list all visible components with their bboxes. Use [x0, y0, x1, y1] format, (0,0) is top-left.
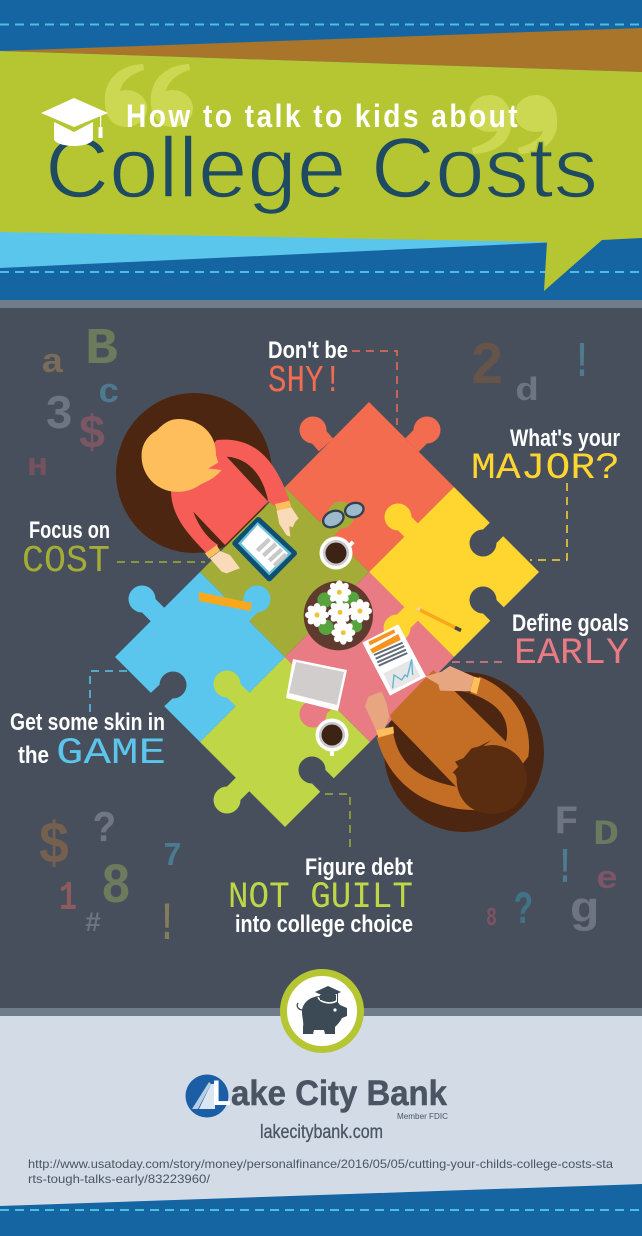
- floating letters: upper right: d: [515, 373, 539, 410]
- source url: rts-tough-talks-early/83223960/: [28, 1172, 211, 1186]
- floating letters: lower left: #: [85, 909, 101, 940]
- shadow circle: person one: [116, 393, 272, 553]
- callout: Focus on COST: Focus on: [29, 517, 110, 544]
- callout: What's your MAJOR: [471, 425, 620, 560]
- floating letters: lower left: 8: [101, 856, 131, 920]
- body and arms: [377, 670, 529, 810]
- website: lakecitybank.com: [260, 1122, 383, 1143]
- callout: Don't be SHY: Don't be: [268, 337, 348, 364]
- callout: Figure debt NOT GUILT: Figure debt: [305, 854, 413, 881]
- floating letters: upper left: c: [98, 375, 120, 413]
- floating letters: lower right: [486, 800, 619, 937]
- tablet: [235, 520, 294, 578]
- callout: Don't be SHY: SHY!: [268, 360, 342, 403]
- icon: glasses: [320, 501, 365, 530]
- callout: Define goals EARLY: EARLY: [514, 633, 629, 675]
- logo initial: L: [212, 1074, 231, 1113]
- floating letters: upper left: B: [85, 320, 118, 379]
- pencil: [416, 607, 461, 630]
- piece: sky blue: [115, 572, 285, 742]
- floating letters: lower right: e: [596, 861, 618, 898]
- person one: top left: [142, 419, 299, 573]
- floating letters: lower left: ?: [93, 805, 116, 855]
- callout: Get some skin in the GAME: Get some skin in: [10, 709, 165, 736]
- document with chart: [362, 624, 426, 696]
- source url: http://www.usatoday.com/story/money/personalfinance/2016/05/05/cutting-your-childs-college-costs-sta: [28, 1157, 613, 1171]
- floating letters: upper right: [470, 334, 591, 410]
- callout: Figure debt NOT GUILT: NOT GUILT: [228, 877, 413, 919]
- floating letters: upper right: !: [573, 335, 591, 392]
- floating letters: upper left: H: [27, 453, 48, 483]
- icon: piggy bank with cap: [284, 972, 360, 1050]
- floating letters: lower right: 8: [486, 903, 497, 933]
- floating letters: lower right: D: [593, 815, 619, 855]
- floating letters: upper right: 2: [470, 334, 504, 402]
- floating letters: lower right: !: [556, 841, 574, 898]
- decorative opening quote: [105, 64, 193, 127]
- coffee cup one: [320, 536, 355, 570]
- ruler: [199, 592, 252, 611]
- callout: Get some skin in the GAME: the: [18, 742, 49, 769]
- floating letters: lower left: !: [158, 895, 176, 956]
- header band: [0, 0, 642, 308]
- callout: Don't be SHY: [268, 337, 397, 425]
- callout: Focus on COST: COST: [22, 540, 110, 583]
- hands: [365, 692, 389, 730]
- piece: yellow: [369, 487, 539, 657]
- callout: Figure debt NOT GUILT: [228, 794, 413, 938]
- coffee cup two: [316, 718, 348, 756]
- floating letters: lower left: $: [38, 815, 70, 880]
- callout: Define goals EARLY: [452, 610, 629, 675]
- floating letters: lower right: F: [554, 800, 579, 846]
- piece: pink: [285, 572, 454, 742]
- callout: Get some skin in the GAME: [10, 671, 166, 775]
- floating letters: lower left: 1: [59, 876, 77, 922]
- logo globe: [186, 1074, 228, 1118]
- person two: bottom right: [365, 666, 529, 814]
- floating letters: upper left: $: [78, 409, 106, 461]
- hair: [453, 740, 527, 814]
- body and arms: [171, 440, 290, 553]
- hair: [142, 419, 222, 492]
- floating letters: lower right: g: [569, 886, 599, 936]
- callout: Get some skin in the GAME: GAME: [56, 733, 166, 775]
- puzzle: [115, 402, 539, 827]
- floating letters: upper left: [27, 320, 120, 483]
- notebook: [286, 659, 347, 711]
- callout: Figure debt NOT GUILT: into college choice: [235, 911, 413, 938]
- icon: graduation cap: [41, 98, 108, 146]
- callout: Focus on COST: [22, 517, 205, 583]
- piece: lime: [200, 657, 370, 827]
- piece: orange: [285, 402, 454, 572]
- cuffs: [376, 727, 394, 738]
- title small: How to talk to kids about: How to talk to kids about: [126, 99, 518, 134]
- hands: [277, 507, 299, 537]
- decorative closing quote: [469, 95, 557, 154]
- shadow circle: person two: [384, 672, 544, 832]
- floating letters: lower right: ?: [514, 885, 533, 937]
- plant in pot: [304, 580, 373, 650]
- footer band: [0, 1008, 642, 1236]
- logo: Lake City Bank: [186, 1074, 448, 1121]
- floating letters: upper left: 3: [45, 389, 73, 443]
- source url: [28, 1157, 613, 1186]
- logo wordmark: ake City Bank: [231, 1074, 447, 1113]
- floating letters: lower left: [38, 805, 182, 956]
- piece: olive: [200, 487, 369, 657]
- cuffs: [275, 501, 291, 511]
- callout: What's your MAJOR: MAJOR?: [471, 448, 620, 490]
- floating letters: lower left: 7: [163, 838, 182, 875]
- floating letters: upper left: a: [41, 345, 64, 383]
- member FDIC: Member FDIC: [397, 1111, 448, 1121]
- title main: College Costs: College Costs: [45, 121, 598, 216]
